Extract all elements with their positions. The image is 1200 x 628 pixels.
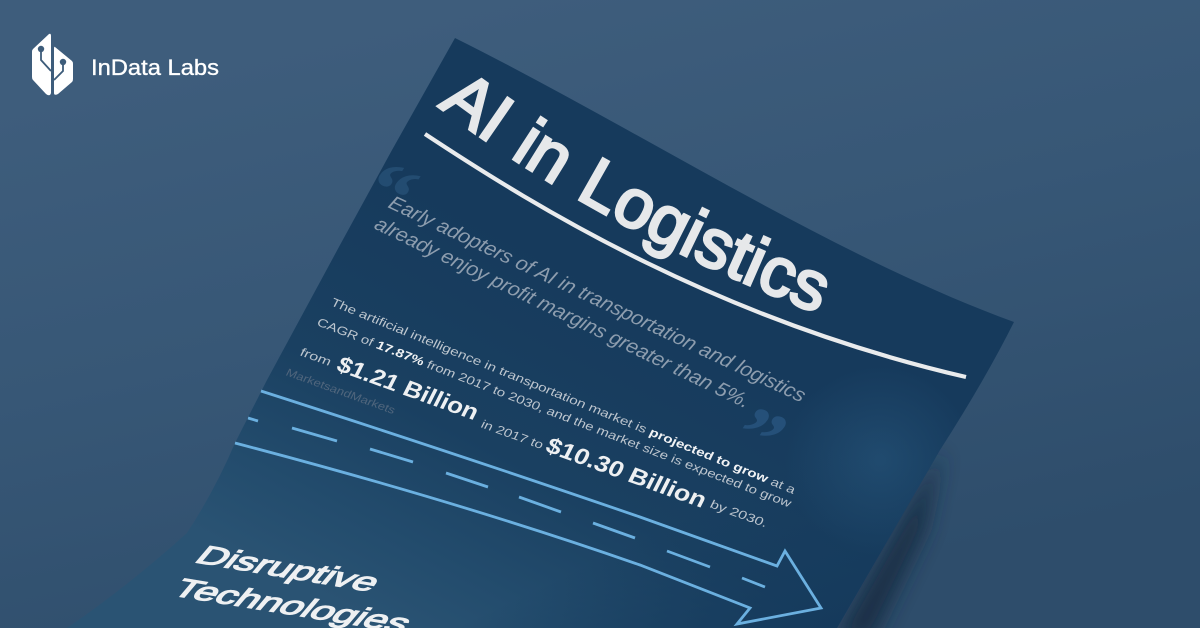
quote mark: opening: “ xyxy=(345,143,433,241)
paper shadow xyxy=(835,450,942,628)
brand name: InData Labs xyxy=(91,55,219,80)
section heading: Technologies xyxy=(165,574,419,628)
logo xyxy=(32,34,219,95)
title underline xyxy=(425,134,966,377)
title: AI in Logistics xyxy=(435,78,828,311)
market paragraph: in 2017 to xyxy=(479,417,546,452)
quote text: Early adopters of AI in transportation and logistics xyxy=(385,192,810,407)
section heading: Disruptive xyxy=(188,541,388,598)
highlight: 2017 market size: $1.21 Billion xyxy=(333,351,484,425)
highlight: 2030 market size: $10.30 Billion xyxy=(542,432,711,513)
arrow: road outline xyxy=(235,391,821,624)
panel: tilted paper sheet xyxy=(142,38,1014,628)
section heading xyxy=(165,541,419,628)
arrow: lane dashes xyxy=(248,418,765,587)
quote text: already enjoy profit margins greater than 5%. xyxy=(371,213,754,413)
market paragraph: The artificial intelligence in transportation market is projected to grow at a xyxy=(329,295,798,497)
market paragraph: by 2030. xyxy=(708,497,770,530)
source label: MarketsandMarkets xyxy=(284,367,398,417)
quote mark: closing: ” xyxy=(713,390,802,485)
icon: InData Labs hexagon mark xyxy=(32,34,73,95)
market paragraph: CAGR of 17.87% from 2017 to 2030, and the market size is expected to grow xyxy=(315,315,794,510)
market paragraph: from xyxy=(298,345,334,369)
